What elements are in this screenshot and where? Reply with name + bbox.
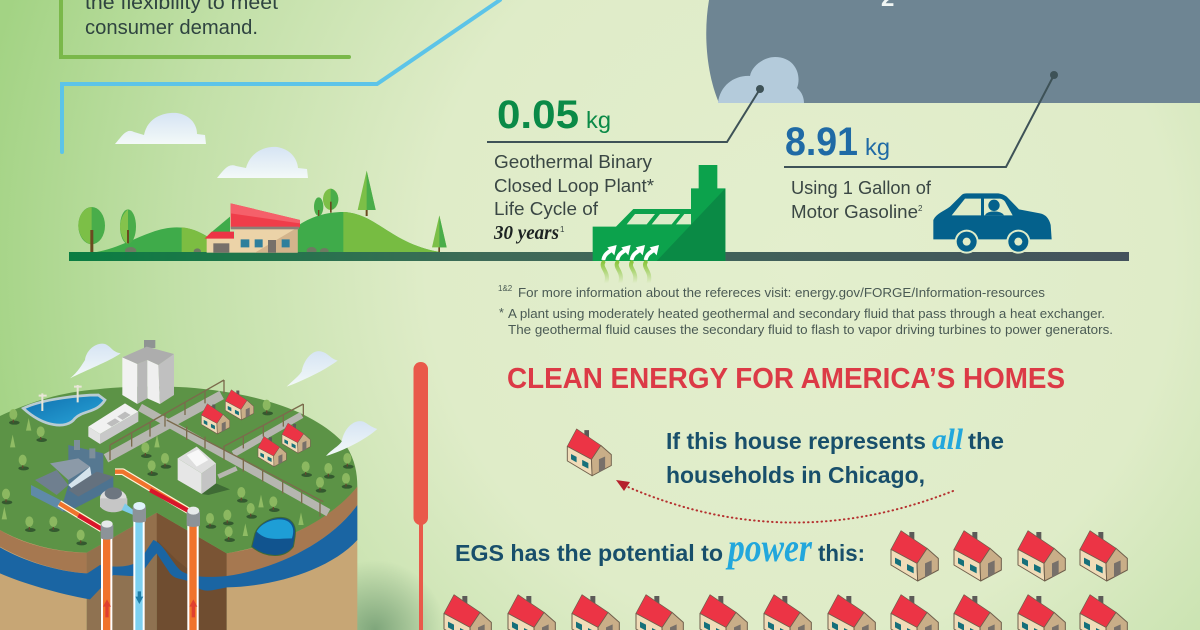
- pine tree: [432, 215, 447, 252]
- heading: CLEAN ENERGY FOR AMERICA’S HOMES: [507, 363, 1065, 395]
- small trees: [2, 400, 354, 545]
- small emissions cloud: [718, 57, 804, 103]
- chicago text: the: [968, 428, 1004, 454]
- tree: [323, 189, 338, 213]
- utility building: [178, 447, 230, 495]
- geothermal description: 1: [560, 225, 565, 234]
- EGS text: this:: [818, 540, 865, 566]
- tree: [120, 209, 136, 244]
- stat: 8.91 kg: kg: [865, 134, 890, 160]
- isometric geothermal cutaway: [0, 340, 377, 630]
- tower building: [122, 340, 174, 404]
- geothermal description: Life Cycle of: [494, 199, 599, 219]
- gasoline description: [791, 178, 932, 222]
- hills, house and trees: [78, 171, 447, 254]
- aquifer band: [0, 505, 357, 599]
- geothermal description: [493, 152, 654, 244]
- geothermal description: Closed Loop Plant*: [494, 176, 654, 196]
- tree: [78, 207, 105, 252]
- factory: [593, 165, 725, 283]
- EGS text: power: [725, 525, 812, 570]
- chicago text: households in Chicago,: [666, 462, 925, 488]
- callout text: consumer demand.: [85, 17, 258, 39]
- ground line: [69, 252, 1129, 261]
- footnotes: *: [499, 306, 504, 320]
- geothermal description: Geothermal Binary: [494, 152, 652, 172]
- village houses: [201, 390, 310, 467]
- hot surface pipes: [59, 472, 190, 529]
- power lines: [110, 380, 323, 517]
- grey emissions cloud: [706, 0, 1200, 103]
- gasoline leader line: [784, 71, 1058, 167]
- footnotes: A plant using moderately heated geothermal and secondary fluid that pass through a heat exchanger.: [508, 307, 1105, 321]
- geothermal description: 30 years: [493, 222, 559, 244]
- geothermal leader line: [487, 85, 764, 142]
- wells: [101, 502, 200, 630]
- house row one: [891, 531, 1127, 581]
- footnotes: [498, 284, 1113, 337]
- red vertical divider: [414, 362, 428, 630]
- stat: 0.05 kg: kg: [586, 107, 611, 133]
- dotted arrow: [616, 480, 953, 523]
- heat waves: [603, 262, 649, 283]
- ground bushes: [125, 247, 329, 254]
- gasoline description: Motor Gasoline: [791, 202, 918, 222]
- tree: [314, 197, 323, 216]
- pine tree: [358, 171, 376, 216]
- cloud right: [217, 147, 308, 178]
- chicago text: [666, 423, 1004, 488]
- pond: [252, 517, 295, 555]
- grass surface: [0, 386, 357, 553]
- EGS text: [455, 525, 865, 570]
- stat: 0.05 kg: 0.05: [497, 93, 579, 137]
- modern house: [205, 203, 300, 253]
- single house icon: [567, 429, 611, 476]
- footnotes: 1&2: [498, 284, 513, 293]
- callout text: [85, 0, 278, 39]
- scene clouds: [70, 344, 377, 456]
- heat exchanger: [100, 487, 133, 515]
- low building: [88, 403, 138, 444]
- stat: 0.05 kg: [497, 93, 611, 137]
- house row two: [444, 595, 1127, 630]
- wind turbines: [39, 385, 82, 411]
- shadow under cutaway: [305, 560, 445, 630]
- power plant: [31, 440, 114, 512]
- blue connector line: [62, 0, 500, 152]
- car: [933, 193, 1052, 254]
- green callout frame: [61, 0, 349, 57]
- cloud left: [115, 113, 206, 144]
- gasoline description: Using 1 Gallon of: [791, 178, 932, 198]
- chicago text: all: [932, 423, 964, 456]
- footnotes: The geothermal fluid causes the secondary fluid to flash to vapor driving turbines to power generators.: [508, 323, 1113, 337]
- footnotes: For more information about the refereces visit: energy.gov/FORGE/Information-resources: [518, 286, 1045, 300]
- soil blocks: [0, 487, 357, 630]
- heat arrows: [603, 250, 654, 260]
- chicago text: If this house represents: [666, 428, 926, 454]
- roads: [106, 395, 328, 513]
- gasoline description: 2: [918, 204, 923, 213]
- lake: [23, 395, 105, 425]
- stat: 8.91 kg: 8.91: [785, 120, 858, 164]
- EGS text: EGS has the potential to: [455, 540, 723, 566]
